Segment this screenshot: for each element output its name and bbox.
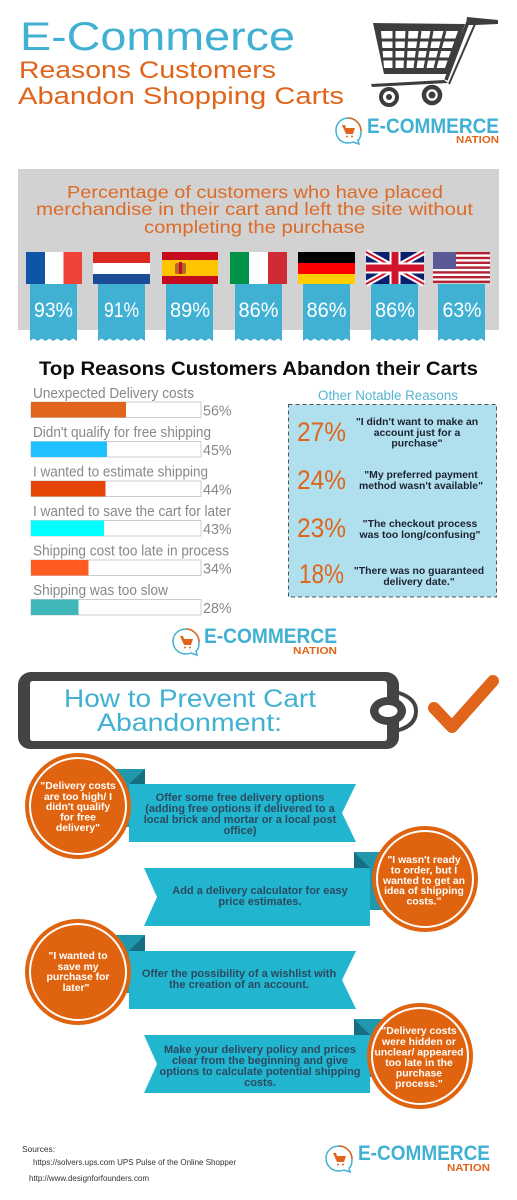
bar: unexpected delivery costs: 56% [203, 404, 232, 420]
tip 3: wishlist: later" [63, 983, 90, 994]
stat: 24%: method wasn't available" [359, 481, 483, 492]
tip 4: clear delivery policy [144, 1003, 473, 1109]
stat: 23%: 23% [297, 513, 346, 543]
icon: flag of Spain [162, 252, 218, 284]
sources: http://www.designforfounders.com [29, 1173, 149, 1183]
stat: 23%: was too long/confusing" [359, 530, 481, 541]
sources: Sources: [22, 1144, 55, 1154]
bar: cost too late: 34% [203, 562, 232, 578]
tip 4: clear delivery policy: purchase [396, 1068, 442, 1080]
title: E-Commerce [20, 15, 295, 59]
tip 3: wishlist [25, 919, 356, 1025]
stat: 27%: purchase" [391, 438, 443, 450]
ribbons with percentages: 86% [375, 299, 415, 322]
panel: other notable reasons [288, 404, 496, 597]
tip 1: free delivery: delivery" [56, 823, 100, 834]
logo: E-Commerce Nation middle: E-COMMERCE [204, 625, 337, 648]
tip 1: free delivery: didn't qualify [46, 802, 110, 813]
bar: estimate shipping: 44% [203, 482, 232, 498]
ribbons with percentages [30, 284, 485, 341]
stat: 24%: 24% [297, 465, 346, 495]
bar: shipping too slow [31, 583, 232, 617]
tip 1: free delivery: (adding free options if delivered to a [145, 803, 336, 815]
stat: 24% [297, 465, 483, 495]
tip 3: wishlist: the creation of an account. [169, 979, 309, 991]
logo: E-Commerce Nation footer: NATION [447, 1162, 490, 1174]
tip 2: delivery calculator: "I wasn't ready [387, 855, 461, 866]
icon: flag of France [26, 252, 82, 284]
tip 4: clear delivery policy: too late in the [385, 1058, 453, 1069]
bar: unexpected delivery costs: Unexpected Delivery costs [33, 386, 194, 402]
tip 1: free delivery [25, 753, 356, 859]
tip 4: clear delivery policy: unclear/ appeared [375, 1048, 463, 1058]
ribbons with percentages: 86% [306, 299, 346, 322]
heading: how to prevent: Abandonment: [97, 709, 282, 737]
banner: how to prevent cart abandonment tag [18, 672, 418, 749]
icon: shopping cart [371, 17, 498, 105]
tip 1: free delivery: are too high/ I [44, 792, 112, 803]
logo: E-Commerce Nation footer [326, 1142, 490, 1174]
tip 2: delivery calculator: wanted to get an [382, 876, 465, 887]
tip 4: clear delivery policy: clear from the beginning and give [172, 1055, 348, 1067]
tip 1: free delivery: for free [60, 812, 96, 824]
title: Abandon Shopping Carts [18, 83, 344, 110]
tip 4: clear delivery policy: process." [395, 1079, 443, 1090]
stat: 18% [299, 559, 484, 589]
title [18, 15, 344, 110]
stat: 24%: "My preferred payment [364, 470, 478, 481]
logo: E-Commerce Nation middle [173, 625, 337, 657]
stat: 18%: delivery date." [383, 577, 455, 588]
tip 4: clear delivery policy: costs. [244, 1077, 276, 1089]
ribbons with percentages: 93% [34, 299, 73, 322]
tip 2: delivery calculator: price estimates. [218, 896, 302, 908]
tip 4: clear delivery policy: options to calculate potential shipping [159, 1066, 361, 1078]
bar: save cart for later: I wanted to save the cart for later [33, 504, 231, 520]
bar: save cart for later [31, 504, 232, 538]
heading: percentage of customers [36, 182, 473, 237]
tip 1: free delivery: local brick and mortar or a local post [144, 814, 337, 826]
tip 4: clear delivery policy: were hidden or [381, 1037, 456, 1048]
stat: 18%: "There was no guaranteed [354, 566, 484, 577]
heading: how to prevent: How to Prevent Cart [64, 685, 316, 713]
ribbons with percentages: 63% [442, 299, 482, 322]
ribbons with percentages: 86% [238, 299, 278, 322]
icon: flag of Italy [230, 252, 287, 284]
bar: free shipping [31, 425, 232, 459]
ribbons with percentages: 89% [170, 299, 210, 322]
heading: how to prevent [64, 685, 316, 737]
bar: save cart for later: 43% [203, 522, 232, 538]
tip 3: wishlist: Offer the possibility of a wishlist with [142, 968, 336, 980]
heading: percentage of customers: completing the purchase [144, 217, 365, 237]
stat: 23%: "The checkout process [363, 519, 478, 530]
stat: 27%: account just for a [374, 428, 461, 439]
stat: 23% [297, 513, 481, 543]
bar: shipping too slow: 28% [203, 601, 232, 617]
tip 4: clear delivery policy: "Delivery costs [381, 1026, 457, 1037]
icon: check mark [434, 681, 493, 727]
tip 2: delivery calculator [144, 826, 478, 932]
panel: abandonment percentage by country [18, 169, 499, 341]
tip 1: free delivery: Offer some free delivery options [156, 792, 324, 804]
tip 4: clear delivery policy: Make your delivery policy and prices [164, 1044, 356, 1056]
heading: percentage of customers: merchandise in their cart and left the site without [36, 199, 473, 219]
heading: top reasons: Top Reasons Customers Abandon their Carts [39, 358, 478, 380]
icon: flag of the United States [433, 252, 490, 283]
tip 1: free delivery: office) [224, 825, 257, 837]
bar: cost too late: Shipping cost too late in process [33, 544, 229, 560]
tip 1: free delivery: "Delivery costs [40, 781, 116, 792]
bar: cost too late [31, 544, 232, 578]
tip 3: wishlist: "I wanted to [48, 951, 108, 962]
sources [22, 1144, 236, 1183]
logo: E-Commerce Nation footer: E-COMMERCE [358, 1142, 490, 1165]
tip 3: wishlist: save my [57, 962, 99, 973]
icon: flag of the Netherlands [93, 252, 150, 284]
tip 2: delivery calculator: Add a delivery calculator for easy [172, 885, 349, 897]
logo: E-Commerce Nation middle: NATION [293, 645, 337, 657]
heading: other notable reasons: Other Notable Reasons [318, 388, 458, 403]
icon: flag of Germany [298, 252, 355, 284]
sources: https://solvers.ups.com UPS Pulse of the Online Shopper [33, 1157, 236, 1167]
stat: 18%: 18% [299, 559, 344, 589]
heading: percentage of customers: Percentage of customers who have placed [67, 182, 443, 202]
bar chart: top reasons [31, 386, 232, 617]
bar: shipping too slow: Shipping was too slow [33, 583, 169, 599]
title: Reasons Customers [19, 57, 276, 84]
bar: estimate shipping: I wanted to estimate shipping [33, 464, 208, 480]
logo: E-Commerce Nation header: E-COMMERCE [367, 115, 499, 138]
logo: E-Commerce Nation header: NATION [456, 134, 499, 146]
tip 2: delivery calculator: idea of shipping [384, 886, 464, 897]
logo: E-Commerce Nation header [336, 115, 499, 146]
tip 2: delivery calculator: costs." [407, 896, 442, 908]
stat: 27% [297, 417, 478, 450]
icon: flag of the United Kingdom [366, 252, 424, 284]
bar: unexpected delivery costs [31, 386, 232, 420]
bar: free shipping: 45% [203, 443, 232, 459]
tip 2: delivery calculator: to order, but I [391, 866, 457, 876]
ribbons with percentages: 91% [104, 299, 139, 322]
bar: estimate shipping [31, 464, 232, 498]
bar: free shipping: Didn't qualify for free shipping [33, 425, 211, 441]
stat: 27%: 27% [297, 417, 346, 447]
stat: 27%: "I didn't want to make an [356, 417, 478, 428]
tip 3: wishlist: purchase for [47, 972, 109, 983]
